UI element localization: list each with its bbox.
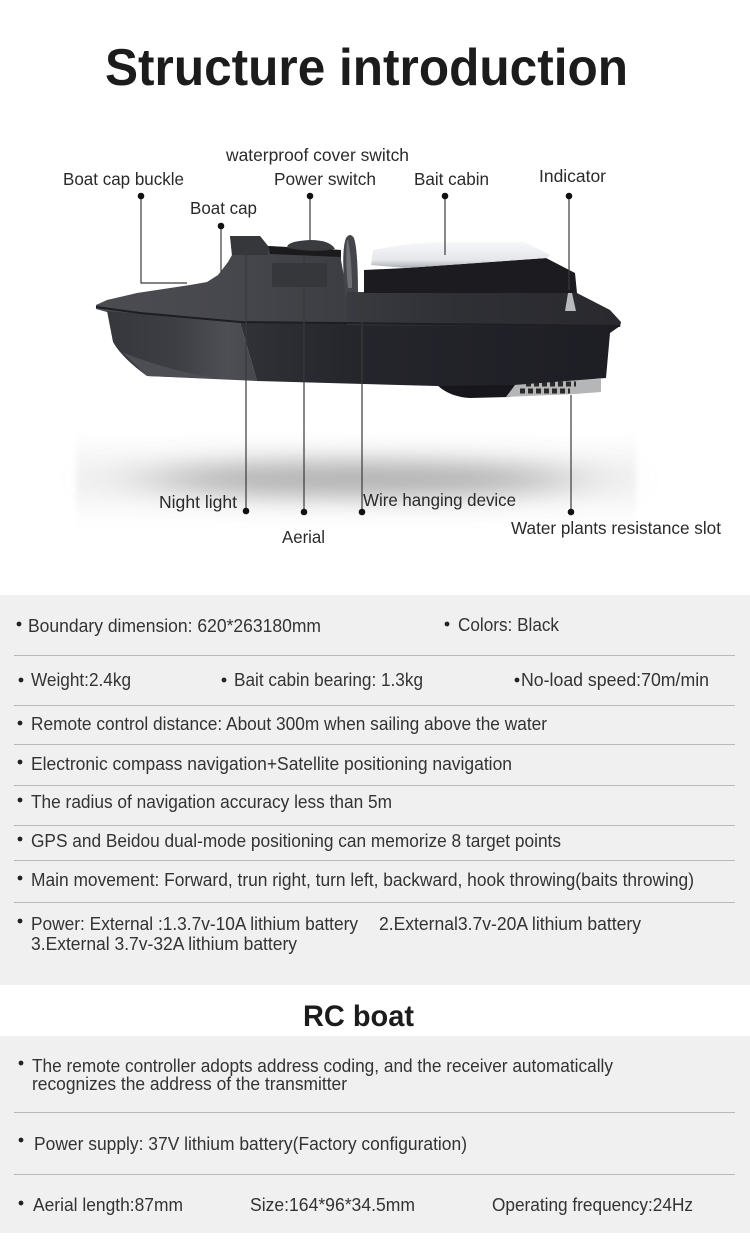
spec text: Electronic compass navigation+Satellite positioning navigation <box>31 754 512 774</box>
boat shadow <box>76 455 636 503</box>
rim <box>96 307 620 326</box>
spec text: Main movement: Forward, trun right, turn left, backward, hook throwing(baits throwing) <box>31 870 694 890</box>
spec text: No-load speed:70m/min <box>521 670 709 690</box>
title: Structure introduction <box>105 39 628 97</box>
label dots <box>138 193 574 515</box>
spec text: Power: External :1.3.7v-10A lithium battery <box>31 914 358 934</box>
bow deck and cabin <box>96 236 347 324</box>
spec text <box>28 615 709 954</box>
part labels: Boat cap buckle <box>63 169 184 189</box>
part labels: Power switch <box>274 169 376 189</box>
spec text: GPS and Beidou dual-mode positioning can memorize 8 target points <box>31 831 561 851</box>
leader lines <box>141 196 571 511</box>
spec text: 3.External 3.7v-32A lithium battery <box>31 934 297 954</box>
part labels: Wire hanging device <box>363 490 516 510</box>
part labels: waterproof cover switch <box>225 145 409 165</box>
spec text: Colors: Black <box>458 615 560 635</box>
spec bullets <box>17 622 519 923</box>
indicator post <box>565 293 576 311</box>
part labels: Bait cabin <box>414 169 489 189</box>
bow hull <box>107 311 257 381</box>
part labels: Indicator <box>539 166 606 186</box>
part labels: Boat cap <box>190 198 257 218</box>
stern hull <box>240 322 620 386</box>
controller bullets <box>19 1061 23 1205</box>
panel: remote controller <box>0 1036 750 1233</box>
aerial arch <box>343 235 358 296</box>
spec text: Weight:2.4kg <box>31 670 131 690</box>
spec text: Bait cabin bearing: 1.3kg <box>234 670 423 690</box>
controller text: recognizes the address of the transmitter <box>32 1074 347 1094</box>
controller text: Aerial length:87mm <box>33 1195 183 1215</box>
fin <box>230 236 268 255</box>
part labels: Aerial <box>282 527 325 547</box>
panel: specifications <box>0 595 750 985</box>
controller text: Power supply: 37V lithium battery(Factory configuration) <box>34 1134 467 1154</box>
bait cabin lid <box>371 242 550 268</box>
weed slot <box>506 379 601 397</box>
spec text: Boundary dimension: 620*263180mm <box>28 616 321 636</box>
bait cabin base <box>364 258 577 293</box>
spec text: The radius of navigation accuracy less than 5m <box>31 792 392 812</box>
keel fin <box>437 384 516 398</box>
spec text: Remote control distance: About 300m when sailing above the water <box>31 714 547 734</box>
boat diagram <box>63 145 721 547</box>
controller text: The remote controller adopts address coding, and the receiver automatically <box>32 1056 613 1076</box>
cover bar <box>268 246 341 257</box>
controller text <box>32 1056 693 1215</box>
boat body <box>96 235 621 398</box>
dark window <box>272 263 327 287</box>
controller text: Size:164*96*34.5mm <box>250 1195 415 1215</box>
spec text: 2.External3.7v-20A lithium battery <box>379 914 641 934</box>
part labels: Night light <box>159 492 237 512</box>
part labels: Water plants resistance slot <box>511 518 721 538</box>
controller text: Operating frequency:24Hz <box>492 1195 693 1215</box>
part labels <box>63 145 721 547</box>
stern deck <box>347 292 621 327</box>
heading: RC boat: RC boat <box>303 1000 414 1033</box>
